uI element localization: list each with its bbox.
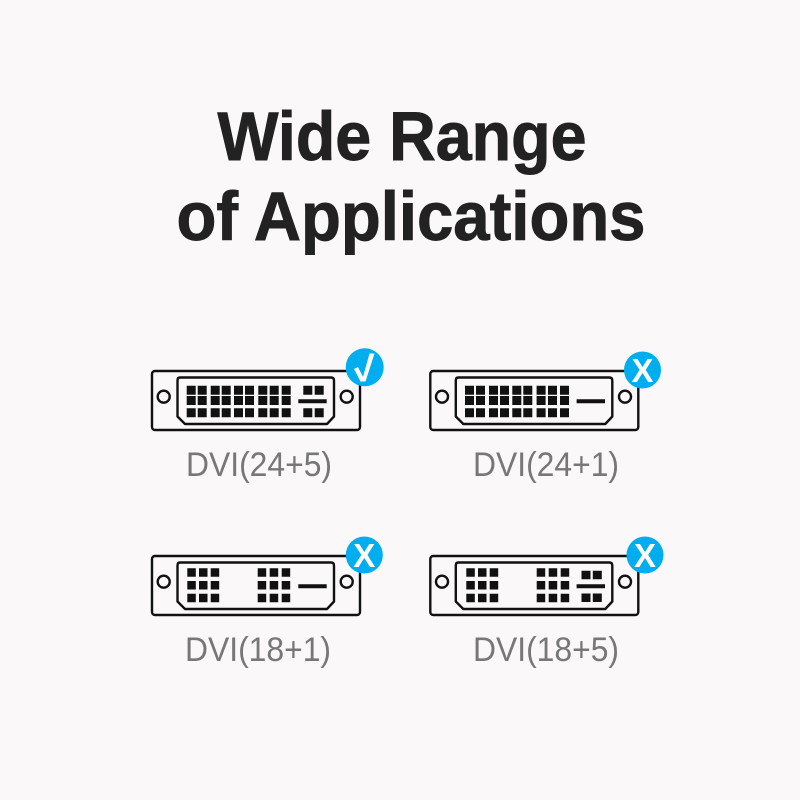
icon: cross badge [346, 536, 383, 574]
pins [466, 568, 605, 602]
label: DVI(18+5) [473, 631, 619, 669]
icon: cross badge: X [634, 537, 656, 574]
connector frame [152, 371, 360, 430]
label: DVI(18+1) [185, 631, 331, 669]
label: DVI(24+1) [473, 446, 619, 484]
icon: cross badge: X [353, 537, 375, 574]
title: of Applications [176, 178, 646, 255]
icon: cross badge [626, 536, 664, 574]
connector frame [152, 556, 360, 615]
pins [187, 386, 327, 417]
panel: DVI(18+5) [430, 536, 664, 669]
icon: check badge [346, 348, 384, 386]
pins [187, 568, 327, 602]
pins [465, 386, 605, 417]
title [176, 98, 646, 255]
panel: DVI(24+1) [430, 352, 661, 484]
connector frame [430, 556, 638, 615]
icon: cross badge: X [631, 352, 654, 389]
title: Wide Range [218, 98, 586, 175]
label: DVI(24+5) [186, 446, 332, 484]
connector frame [430, 371, 638, 430]
panel: DVI(18+1) [152, 536, 383, 669]
icon: cross badge [624, 352, 661, 389]
panel: DVI(24+5) [152, 348, 384, 484]
